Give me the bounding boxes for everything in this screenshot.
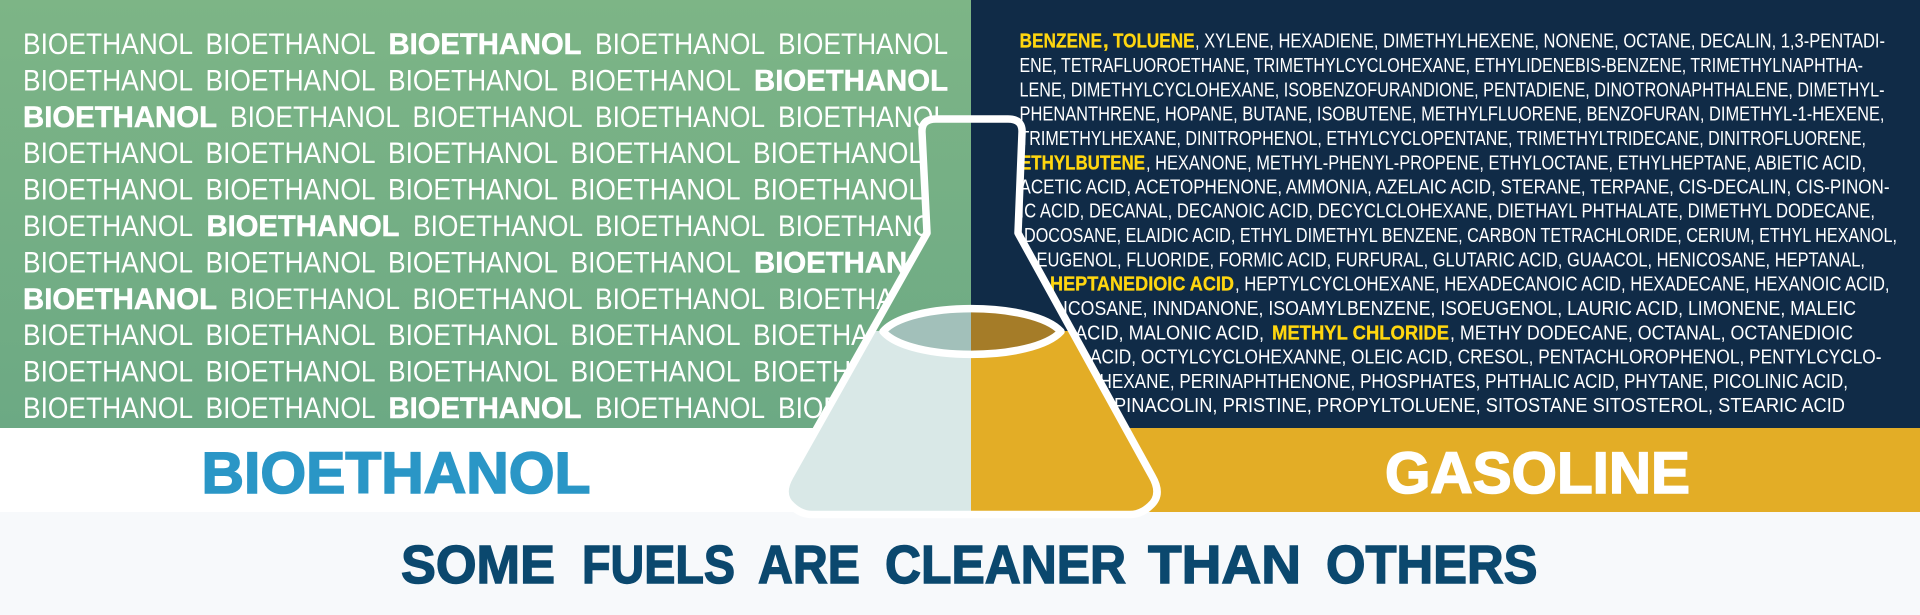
panel: bioethanol word field: BIOETHANOL (23, 137, 193, 170)
panel: bioethanol word field: BIOETHANOL (230, 283, 400, 316)
panel: bioethanol word field: BIOETHANOL (206, 137, 376, 170)
panel: bioethanol word field: BIOETHANOL (595, 210, 765, 243)
panel: bioethanol word field: BIOETHANOL (595, 101, 765, 134)
title: CLEANER (885, 536, 1126, 595)
panel: bioethanol word field: BIOETHANOL (595, 28, 765, 61)
panel: bioethanol word field: BIOETHANOL (23, 392, 193, 425)
panel: bioethanol word field: BIOETHANOL (388, 174, 558, 207)
panel: bioethanol word field: BIOETHANOL (413, 210, 583, 243)
panel: bioethanol word field: BIOETHANOL (23, 356, 193, 389)
panel: bioethanol word field: BIOETHANOL (778, 283, 948, 316)
panel: bioethanol word field: BIOETHANOL (206, 319, 376, 352)
panel: bioethanol word field: BIOETHANOL (754, 246, 948, 279)
panel: gold label band (971, 428, 1920, 513)
panel: bioethanol word field: BIOETHANOL (206, 174, 376, 207)
panel: bioethanol word field: BIOETHANOL (230, 101, 400, 134)
title: SOME (401, 536, 555, 595)
panel: bioethanol word field: BIOETHANOL (23, 64, 193, 97)
panel: bioethanol word field: BIOETHANOL (206, 246, 376, 279)
title (401, 536, 1538, 595)
panel: bioethanol word field: BIOETHANOL (754, 64, 948, 97)
panel: bioethanol word field: BIOETHANOL (206, 210, 400, 243)
panel: gasoline chemical list: METHYL CHLORIDE (1272, 321, 1449, 344)
panel: bioethanol word field: BIOETHANOL (388, 64, 558, 97)
panel: bioethanol word field: BIOETHANOL (206, 64, 376, 97)
panel: bioethanol word field: BIOETHANOL (753, 174, 923, 207)
panel: bioethanol word field: BIOETHANOL (388, 137, 558, 170)
panel: bioethanol word field: BIOETHANOL (388, 28, 582, 61)
panel: bioethanol word field: BIOETHANOL (388, 356, 558, 389)
panel: bioethanol word field: BIOETHANOL (23, 174, 193, 207)
panel: bioethanol word field: BIOETHANOL (23, 246, 193, 279)
panel: bioethanol word field: BIOETHANOL (412, 101, 582, 134)
panel: bioethanol word field: BIOETHANOL (23, 101, 217, 134)
panel: gasoline chemical list: , METHY DODECANE, OCTANAL, OCTANEDIOIC (1450, 321, 1853, 344)
title: FUELS (582, 536, 735, 595)
panel: bioethanol word field: BIOETHANOL (388, 246, 558, 279)
panel: bioethanol word field: BIOETHANOL (753, 137, 923, 170)
panel: bioethanol word field: BIOETHANOL (753, 319, 923, 352)
panel: bioethanol word field: BIOETHANOL (570, 174, 740, 207)
panel: bioethanol word field: BIOETHANOL (23, 210, 193, 243)
heading: gasoline: GASOLINE (1385, 441, 1690, 506)
panel: gasoline chemical list: BENZENE (1020, 30, 1102, 53)
panel: bioethanol word field: BIOETHANOL (778, 210, 948, 243)
panel: gasoline chemical list (971, 0, 1920, 428)
panel: bioethanol word field: BIOETHANOL (388, 392, 582, 425)
title: THAN (1148, 536, 1301, 595)
panel: gasoline chemical list: , (1103, 30, 1109, 53)
panel: bioethanol word field: BIOETHANOL (206, 392, 376, 425)
panel: white label band (0, 428, 971, 513)
panel: gasoline chemical list: HEPTANEDIOIC ACID (1050, 273, 1234, 296)
icon: erlenmeyer flask (788, 115, 1161, 512)
panel: bioethanol word field: BIOETHANOL (23, 319, 193, 352)
title: OTHERS (1326, 536, 1538, 595)
panel: bioethanol word field: BIOETHANOL (570, 319, 740, 352)
panel: bioethanol word field: BIOETHANOL (23, 28, 193, 61)
panel: bioethanol word field: BIOETHANOL (778, 101, 948, 134)
panel: bottom title band (0, 512, 1920, 615)
panel: bioethanol word field: BIOETHANOL (570, 246, 740, 279)
panel: bioethanol word field: BIOETHANOL (570, 137, 740, 170)
panel: gasoline chemical list: PINACOLIN, PRISTINE, PROPYLTOLUENE, SITOSTANE SITOSTEROL, STEARIC ACID (1114, 394, 1845, 417)
panel: bioethanol word field: BIOETHANOL (23, 283, 217, 316)
panel: bioethanol word field: BIOETHANOL (595, 283, 765, 316)
panel: bioethanol word field: BIOETHANOL (778, 392, 948, 425)
panel: bioethanol word field: BIOETHANOL (206, 28, 376, 61)
panel: bioethanol word field: BIOETHANOL (412, 283, 582, 316)
panel: bioethanol word field: BIOETHANOL (570, 356, 740, 389)
panel: bioethanol word field: BIOETHANOL (570, 64, 740, 97)
panel: bioethanol word field (0, 0, 971, 428)
title: ARE (758, 536, 860, 595)
panel: gasoline chemical list: ACID, MALONIC ACID, (1075, 321, 1264, 344)
panel: bioethanol word field: BIOETHANOL (206, 356, 376, 389)
heading: bioethanol: BIOETHANOL (202, 441, 590, 506)
panel: gasoline chemical list: TOLUENE (1113, 30, 1194, 53)
panel: gasoline chemical list: ETHYLBUTENE (1020, 151, 1145, 174)
panel: bioethanol word field: BIOETHANOL (753, 356, 923, 389)
panel: bioethanol word field: BIOETHANOL (595, 392, 765, 425)
panel: bioethanol word field: BIOETHANOL (778, 28, 948, 61)
panel: bioethanol word field: BIOETHANOL (388, 319, 558, 352)
